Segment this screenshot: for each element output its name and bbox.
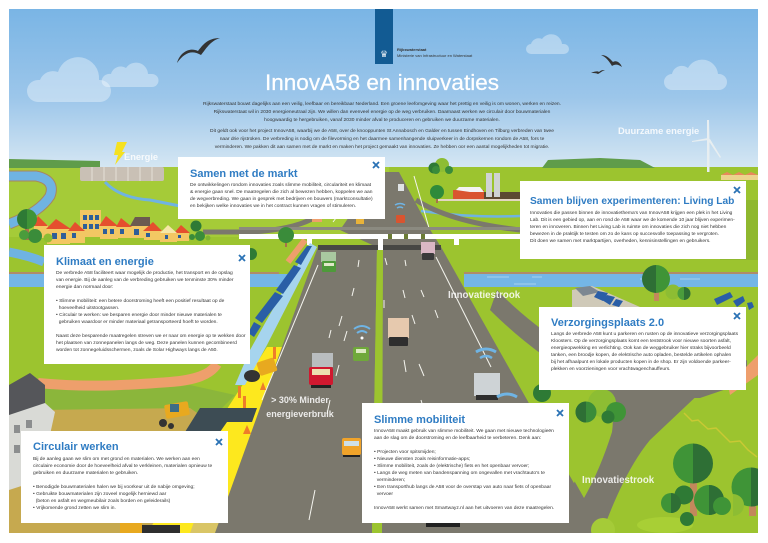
panel: Slimme mobiliteit: • Nieuwe diensten zoals reisinformatie-apps; (374, 457, 470, 462)
panel: Slimme mobiliteit: • Een transporthub langs de A58 voor de overstap van auto naar fiets of openbaar (374, 485, 551, 490)
panel: Slimme mobiliteit: • Slimme mobiliteit, zoals de (elektrische) fiets en het openbaar vervoer; (374, 464, 529, 469)
intro text: Rijkswaterstaat (203, 102, 561, 123)
panel: Circulair werken: Bij de aanleg gaan we slim om met grond en materialen. We werken aan een (33, 457, 200, 462)
panel: Samen met de markt: en bekijken welke innovaties we in het contract kunnen vragen of stimuleren. (190, 204, 356, 209)
panel: Samen met de markt: Samen met de markt (190, 168, 298, 180)
panel: Slimme mobiliteit: • Projecten voor spitsmijden; (374, 450, 436, 455)
panel: Slimme mobiliteit: • Langs de weg meten van bandenspanning om ongevallen met vrachtauto's te (374, 471, 545, 476)
panel: Verzorgingsplaats 2.0: bij het afhaalpunt en lokale producten kopen in de shop. Er zijn voldoende parkeer- (551, 360, 731, 365)
logo: Rijkswaterstaat: Rijkswaterstaat (397, 47, 426, 52)
panel: Klimaat en energie (44, 245, 250, 364)
label: Innovatiestrook right: Innovatiestrook (582, 475, 654, 486)
construction strip (147, 347, 285, 533)
panel: Slimme mobiliteit: Slimme mobiliteit (374, 414, 465, 426)
panel: Verzorgingsplaats 2.0: tanken, een broodje kopen, de elektrische auto opladen, bestelde artikelen ophalen (551, 353, 731, 358)
panel: Verzorgingsplaats 2.0: Kloosters. Op de verzorgingsplaats komt een teststrook voor nieuwe soorten asfalt, (551, 339, 731, 344)
panel: Klimaat en energie: van energie. Bij de aanleg van de verbreding gebruiken we tenminste 30% minder (56, 278, 234, 283)
panel: Circulair werken: • Vrijkomende grond zetten we slim in. (33, 506, 116, 511)
panel: Klimaat en energie: worden tot zonnegeluidsschermen, zoals de Solar Highways langs de A50. (56, 348, 218, 353)
panel: Slimme mobiliteit (362, 403, 569, 523)
logo: Rijkswaterstaat (375, 9, 472, 64)
panel: Slimme mobiliteit: aan de slag om de doorstroming en de leefbaarheid te verbeteren. Denk aan: (374, 436, 541, 441)
panel: Verzorgingsplaats 2.0: Verzorgingsplaats 2.0 (551, 317, 664, 329)
label: 30% minder energieverbruik: energieverbruik (266, 409, 334, 419)
building under construction (9, 373, 55, 490)
panel: Verzorgingsplaats 2.0 (539, 307, 746, 390)
icon: close (238, 254, 246, 262)
solar noise barrier (235, 243, 317, 385)
panel: Klimaat en energie: hoeveelheid uitstootgassen. (59, 306, 119, 311)
road markings (262, 176, 491, 520)
panel: Samen blijven experimenteren: Living Lab: bewezen in de praktijk te testen om zo de kans op succesvolle toepassing te vergroten. (530, 232, 719, 237)
panel: Circulair werken: gebruiken en duurzame materialen te gebruiken. (33, 471, 138, 476)
intro text: project InnovA58: verminderen. We pakken dit aan samen met de markt en maken het project gemaakt van innovaties. Ze hebben oor een aantal mogelijkheden tot migratie. (215, 145, 549, 150)
panel: Slimme mobiliteit: InnovA58 maakt gebruik van slimme mobiliteit. We gaan met nieuwe technologieën (374, 429, 554, 434)
panel: Samen blijven experimenteren: Living Lab: teren en innoveren. Binnen het Living Lab is ruimte om innovaties die zich nog niet hebben (530, 225, 726, 230)
panel: Slimme mobiliteit: verminderen; (377, 478, 405, 483)
panel: Circulair werken: (beton en asfalt en wegmeubilair zoals borden en geleiderails) (36, 499, 170, 504)
hill and orange path (45, 385, 235, 412)
panel: Klimaat en energie: Klimaat en energie (56, 256, 154, 268)
logo: Rijkswaterstaat: Ministerie van Infrastructuur en Waterstaat (397, 53, 472, 58)
panel: Samen blijven experimenteren: Living Lab: Dit doen we samen met marktpartijen, overheden, kennisinstellingen en gebruikers. (530, 239, 711, 244)
intro text: project InnovA58: Dit geldt ook voor het project InnovA58, waarbij we de A58, over de knooppunten St Annabosch en Galder en tussen Eindhoven en Tilburg verbreden van twee (210, 129, 554, 134)
panel: Samen blijven experimenteren: Living Lab: Samen blijven experimenteren: Living Lab (530, 196, 734, 207)
icon: close (215, 438, 223, 446)
intro text: Rijkswaterstaat: Rijkswaterstaat bouwt dagelijks aan een veilig, leefbaar en bereikbaar Nederland. Een groene leefomgeving waar het prettig en veilig is om wonen, werken en reizen. (203, 102, 561, 107)
panel: Klimaat en energie: Naast deze besparende maatregelen streven we er naar om energie op te wekken door (56, 334, 246, 339)
panel: Klimaat en energie: • Slimme mobiliteit: een betere doorstroming heeft een positief resultaat op de (56, 299, 224, 304)
logo: Rijkswaterstaat: ♛ (380, 49, 388, 59)
title: InnovA58 en innovaties (265, 70, 499, 95)
panel: Samen blijven experimenteren: Living Lab: Lab. Dit is een gebied op, aan en rond de A58 waar we de komende 10 jaar blijven experimen- (530, 218, 735, 223)
panel: Klimaat en energie: De verbrede A58 faciliteert waar mogelijk de productie, het transport en de opslag (56, 271, 233, 276)
farm and silos (437, 173, 520, 201)
icon: lightning bolt (114, 142, 127, 165)
label: Energie: Energie (124, 152, 158, 162)
road vehicles (309, 184, 500, 527)
highway roads (340, 172, 574, 533)
icon: close (733, 312, 741, 320)
panel: Circulair werken: circulaire economie door de hoeveelheid afval te verkleinen, materialen opnieuw te (33, 464, 212, 469)
label: Duurzame energie: Duurzame energie (618, 125, 699, 136)
panel: Klimaat en energie: gebruiken waardoor er minder materiaal getransporteerd hoeft te worden. (59, 320, 218, 325)
trees (17, 158, 768, 542)
panel: Klimaat en energie: energie dan normaal door: (56, 285, 113, 290)
icon: close (733, 186, 741, 194)
intro text: project InnovA58 (210, 128, 554, 150)
wind turbine (692, 120, 721, 172)
panel: Circulair werken (21, 431, 228, 523)
label: Innovatiestrook centre: Innovatiestrook (448, 290, 520, 301)
panel: Samen met de markt: & energie gaan snel. De maatregelen die zich al bewezen hebben, koppelen we aan (190, 190, 372, 195)
sky clouds and birds (27, 34, 727, 102)
greenhouses and energy (80, 167, 164, 181)
panel: Verzorgingsplaats 2.0: energieopwekking en verlichting. Ook kan de weggebruiker hier straks bijvoorbeeld (551, 346, 731, 351)
panel: Circulair werken: • Gebruikte bouwmaterialen zijn zoveel mogelijk herniewd aar (33, 492, 166, 497)
panel: Samen blijven experimenteren: Living Lab (520, 181, 746, 259)
label: 30% minder energieverbruik: > 30% Minder (271, 395, 329, 405)
wifi signals (354, 204, 517, 397)
panel: Klimaat en energie: • Circulair te werken: we besparen energie door minder nieuwe materialen te (56, 313, 222, 318)
overpass bridge (239, 227, 520, 250)
icon: close (556, 409, 564, 417)
panel: Samen blijven experimenteren: Living Lab: Innovaties die passen binnen de innovatiethema's van InnovA58 krijgen een plek in het Living (530, 211, 732, 216)
rest area building with solar panels (572, 286, 754, 310)
intro text: Rijkswaterstaat: hoogwaardig te hergebruiken, vanaf 2030 minder afval te produceren en gebruiken we duurzame materialen. (264, 118, 500, 123)
blue canals and rivers (9, 176, 520, 262)
intro text: project InnovA58: naar drie rijstroken. De verbreding is nodig om de filevorming en het daarmee samenhangende sluipverkeer in de dorpskernen rondom de A58, fors te (220, 137, 544, 142)
panel: Samen met de markt: de wegverbreding. We gaan in gesprek met bedrijven en bouwers (marktconsultatie) (190, 197, 373, 202)
panel: Slimme mobiliteit: InnovA58 werkt samen met Smartwayz.nl aan het uitvoeren van deze maatregelen. (374, 506, 554, 511)
panel: Slimme mobiliteit: vervoer (377, 492, 393, 497)
panel: Verzorgingsplaats 2.0: plekken en voorzieningen voor vrachtwagenchauffeurs. (551, 367, 671, 372)
village houses (33, 210, 190, 244)
panel: Verzorgingsplaats 2.0: Langs de verbrede A58 kunt u parkeren en rusten op de innovatieve verzorgingsplaats (551, 332, 738, 337)
label: 30% minder energieverbruik (266, 395, 334, 419)
icon: close (372, 161, 380, 169)
panel: Samen met de markt (178, 157, 385, 219)
intro text: Rijkswaterstaat: Rijkswaterstaat wil in 2030 energieneutraal zijn. We willen dan evenveel energie op de weg verbruiken. Daarnaast werken we circulair door bouwmaterialen (214, 110, 550, 115)
distant houses (721, 172, 758, 180)
panel: Circulair werken: • Benodigde bouwmaterialen halen we bij voorkeur uit de nabije omgeving; (33, 485, 195, 490)
panel: Klimaat en energie: het plaatsen van zonnepanelen langs de weg. Deze panelen kunnen gecombineerd (56, 341, 237, 346)
roadworks machines and cones (120, 347, 278, 533)
panel: Circulair werken: Circulair werken (33, 441, 119, 453)
panel: Samen met de markt: De ontwikkelingen rondom innovaties zoals slimme mobiliteit, circulariteit en klimaat (190, 183, 371, 188)
